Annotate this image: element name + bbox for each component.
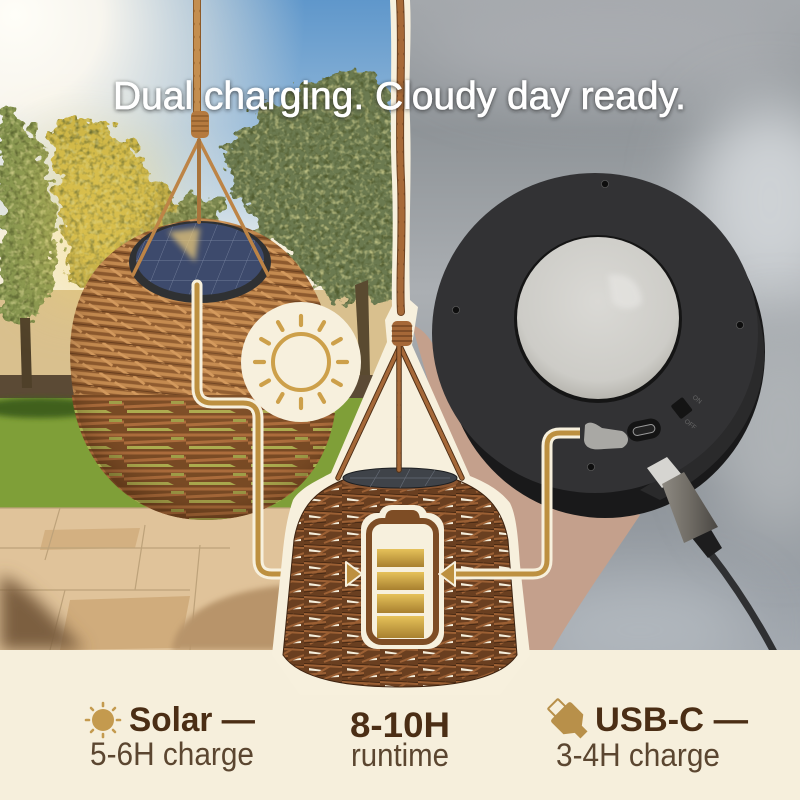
trees <box>0 71 400 318</box>
USB-C charge time: 3-4H charge <box>556 737 720 773</box>
power switch <box>671 396 702 428</box>
USB connector line <box>452 433 580 574</box>
cloudy sky scene <box>400 0 800 680</box>
rubber plug <box>584 423 628 449</box>
charge bars <box>377 549 424 638</box>
solar panel <box>129 221 271 303</box>
wicker body <box>70 218 340 520</box>
battery <box>361 505 444 649</box>
runtime label: runtime <box>351 737 449 773</box>
USB-C cable <box>647 457 774 652</box>
icon: small sun <box>86 703 120 737</box>
ground: mulch and lawn <box>0 375 400 512</box>
arrow: solar into battery <box>346 562 362 586</box>
hanging rope <box>338 0 462 478</box>
solar charge time: 5-6H charge <box>90 736 254 772</box>
solar top <box>342 468 458 490</box>
hanging rope <box>133 0 268 275</box>
solar label: Solar — <box>129 701 255 739</box>
sun glare on foliage <box>40 130 170 300</box>
lamp base face <box>432 173 758 493</box>
lamp base back <box>460 274 765 518</box>
tree trunks <box>20 280 370 388</box>
power switch: ON <box>691 394 703 406</box>
paving <box>0 507 290 650</box>
sunny garden scene <box>0 0 400 650</box>
solar stat <box>86 701 255 772</box>
power switch: OFF <box>683 418 697 432</box>
hand <box>412 325 640 650</box>
dome light <box>514 235 682 403</box>
fence <box>0 290 400 380</box>
solar connector line <box>197 285 346 574</box>
background lamp in sun <box>70 0 340 520</box>
title: Dual charging. Cloudy day ready. <box>113 75 686 118</box>
bottom panel <box>0 650 800 800</box>
icon: USB plug <box>543 694 594 745</box>
wicker body <box>283 480 517 687</box>
runtime value: 8-10H <box>350 706 450 745</box>
foreground lamp cutout <box>272 0 530 695</box>
sun badge <box>241 302 361 422</box>
arrow: USB into battery <box>439 562 455 586</box>
runtime stat <box>350 706 450 773</box>
USB-C port <box>627 418 661 442</box>
USB-C label: USB-C — <box>595 701 748 739</box>
screws <box>452 180 744 471</box>
USB-C stat <box>543 694 748 773</box>
